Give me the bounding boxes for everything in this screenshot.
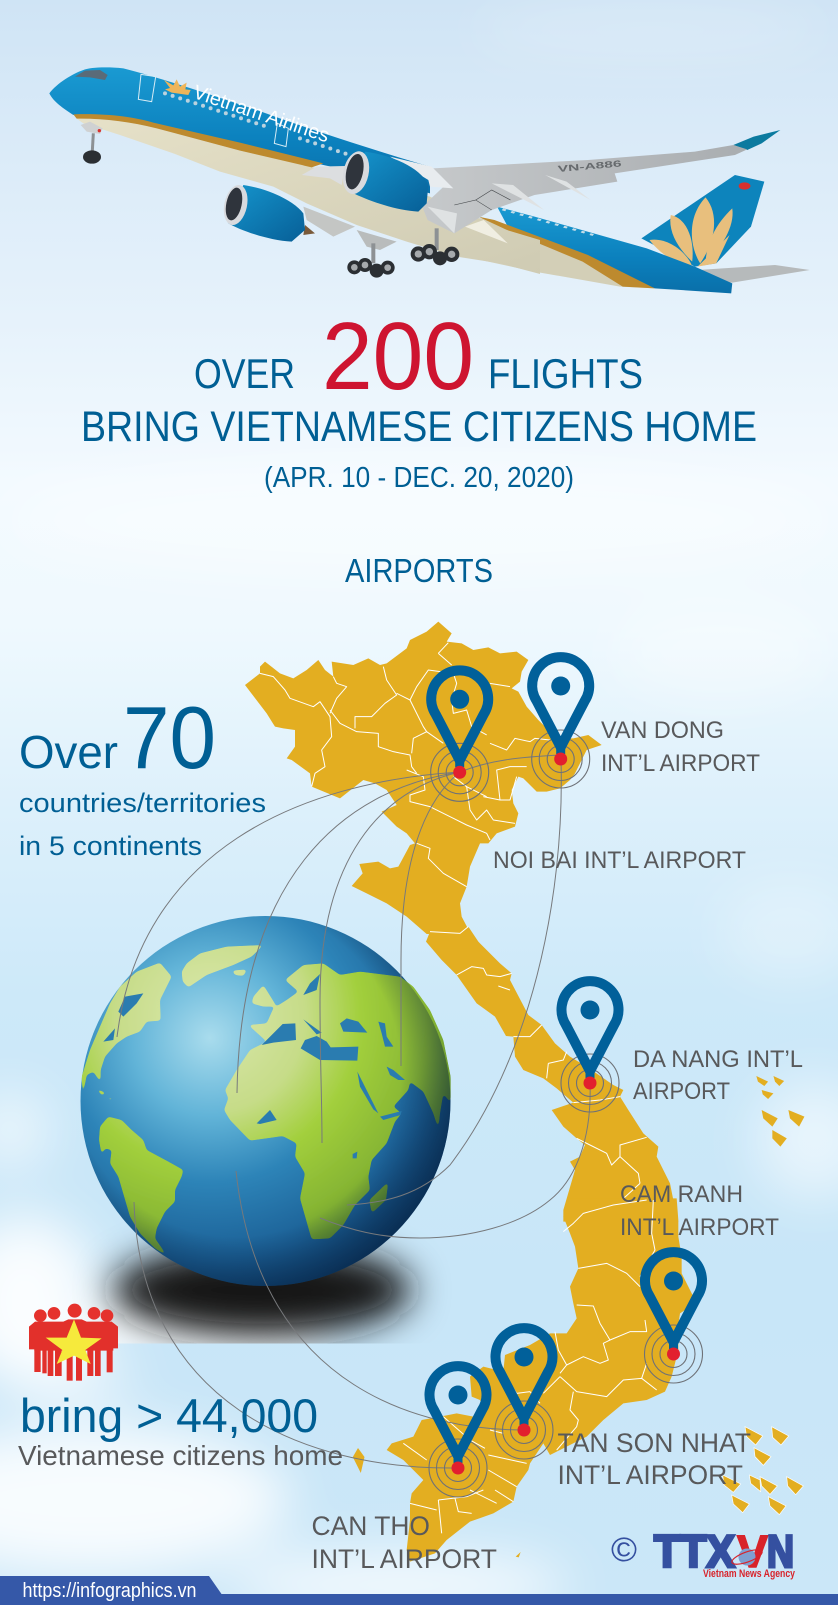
- wing root fairing: [390, 157, 453, 188]
- airport labels: [312, 717, 803, 1574]
- label: Van Dong: INT’L AIRPORT: [601, 750, 760, 777]
- pylon: [302, 166, 345, 185]
- label: Cam Ranh: CAM RANH: [620, 1181, 743, 1208]
- front engine: [339, 149, 428, 212]
- doors: [138, 74, 156, 102]
- central region: [426, 927, 678, 1222]
- label: Tan Son Nhat: [558, 1428, 751, 1490]
- registration on wing: VN-A886: [557, 158, 622, 174]
- label: Cam Ranh: [620, 1181, 779, 1241]
- title: FLIGHTS: [488, 350, 643, 397]
- label: Van Dong: [601, 717, 760, 777]
- TTXVN logo: Vietnam News Agency: [703, 1568, 796, 1580]
- TTXVN logo: N: [767, 1526, 794, 1577]
- stat: over 70 countries: [19, 688, 266, 861]
- globe: [80, 916, 451, 1286]
- map of Vietnam: [245, 622, 804, 1562]
- footer bar: [0, 1576, 838, 1605]
- rear engine: [220, 183, 305, 242]
- section heading: airports: AIRPORTS: [345, 552, 493, 589]
- title: 200: [322, 303, 474, 410]
- stat: over 70 countries: 70: [123, 688, 216, 787]
- label: Van Dong: VAN DONG: [601, 717, 724, 744]
- footer bar: https://infographics.vn: [22, 1580, 196, 1602]
- globe shadow: [70, 1244, 412, 1370]
- continents: [82, 945, 451, 1256]
- engines and gear: [75, 70, 459, 278]
- southern region: [387, 1198, 693, 1562]
- label: Tan Son Nhat: TAN SON NHAT: [558, 1428, 751, 1458]
- seas: [103, 974, 405, 1158]
- stat: 44,000 citizens: Vietnamese citizens home: [18, 1440, 343, 1471]
- stat: 44,000 citizens: [18, 1389, 343, 1471]
- label: Da Nang: DA NANG INT’L: [633, 1046, 803, 1073]
- airline name on fuselage: Vietnam Airlines: [190, 81, 332, 147]
- date range: (APR. 10 - DEC. 20, 2020): [264, 462, 574, 494]
- icon: people with Vietnamese flag star: [29, 1304, 118, 1381]
- TTXVN logo: ©: [611, 1531, 637, 1569]
- landing gear: [81, 122, 459, 278]
- stat: over 70 countries: in 5 continents: [19, 831, 202, 861]
- label: Da Nang: [633, 1046, 803, 1105]
- title: BRING VIETNAMESE CITIZENS HOME: [81, 403, 757, 451]
- stat: over 70 countries: Over: [19, 726, 118, 778]
- wing: [422, 145, 747, 243]
- title: OVER: [194, 350, 295, 397]
- rear of aircraft: [422, 130, 810, 293]
- Truong Sa islands: [723, 1427, 803, 1515]
- label: Tan Son Nhat: INT’L AIRPORT: [558, 1460, 743, 1490]
- Hoang Sa islands: [756, 1076, 804, 1147]
- TTXVN logo: TTX: [654, 1526, 735, 1577]
- label: Can Tho: CAN THO: [312, 1511, 430, 1541]
- stat: 44,000 citizens: bring > 44,000: [20, 1389, 318, 1442]
- location pins: [429, 657, 702, 1497]
- TTXVN logo: [611, 1526, 796, 1580]
- label: Can Tho: INT’L AIRPORT: [312, 1544, 497, 1574]
- windows: [165, 93, 347, 154]
- label: Noi Bai: NOI BAI INT’L AIRPORT: [493, 847, 746, 874]
- front fuselage: [49, 67, 540, 274]
- northern region: [245, 622, 602, 934]
- fuselage lotus: [164, 79, 191, 95]
- label: Da Nang: AIRPORT: [633, 1078, 730, 1105]
- airplane illustration: [49, 67, 810, 293]
- title: [81, 303, 757, 451]
- label: Can Tho: [312, 1511, 497, 1574]
- Phu Quoc island: [353, 1448, 364, 1473]
- label: Cam Ranh: INT’L AIRPORT: [620, 1214, 779, 1241]
- cockpit: [75, 70, 108, 80]
- stat: over 70 countries: countries/territories: [19, 788, 266, 818]
- flight routes: [117, 755, 590, 1468]
- TTXVN logo: V: [737, 1526, 768, 1577]
